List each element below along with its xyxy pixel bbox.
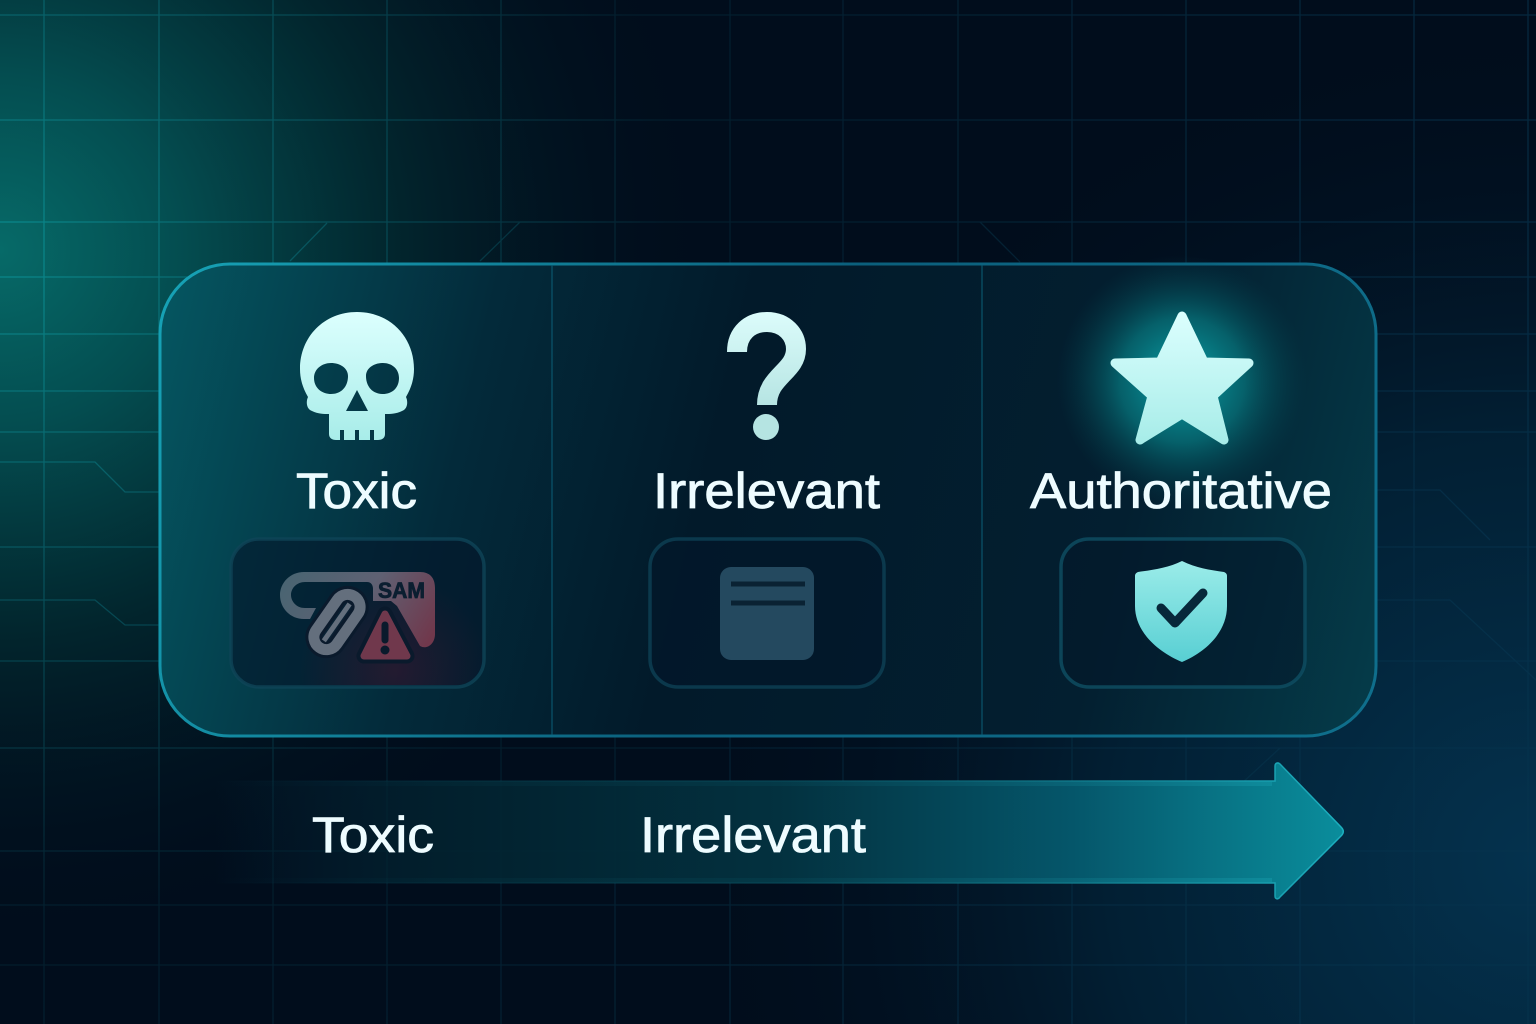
card: shield bbox=[1061, 539, 1305, 687]
arrow label: Irrelevant: Irrelevant bbox=[640, 807, 866, 863]
arrow shape bbox=[215, 763, 1343, 899]
icon text: SAM: SAM bbox=[378, 578, 425, 603]
icon: broken chain link bbox=[309, 589, 365, 655]
column: Irrelevant bbox=[650, 322, 884, 687]
column divider right bbox=[981, 265, 983, 735]
label: Authoritative: Authoritative bbox=[1030, 463, 1332, 519]
icon: skull bbox=[300, 312, 414, 440]
arrow edge highlights bbox=[215, 784, 1272, 880]
icon: document bbox=[720, 567, 814, 660]
card: document bbox=[650, 539, 884, 687]
arrow scale bbox=[215, 763, 1343, 899]
icon: shield check bbox=[1135, 561, 1227, 662]
icon: star bbox=[1115, 316, 1249, 440]
column divider left bbox=[551, 265, 553, 735]
column: Toxic bbox=[231, 312, 484, 687]
main panel bbox=[160, 255, 1376, 736]
label: Irrelevant: Irrelevant bbox=[653, 463, 880, 519]
column: Authoritative bbox=[1030, 316, 1332, 687]
arrow label: Toxic: Toxic bbox=[312, 807, 434, 863]
label: Toxic: Toxic bbox=[296, 463, 417, 519]
icon: question mark bbox=[737, 322, 796, 440]
card: toxic link spam bbox=[231, 539, 484, 687]
icon: spam band bbox=[280, 572, 435, 647]
icon: warning triangle bbox=[364, 614, 407, 656]
star glow bbox=[1057, 255, 1307, 505]
